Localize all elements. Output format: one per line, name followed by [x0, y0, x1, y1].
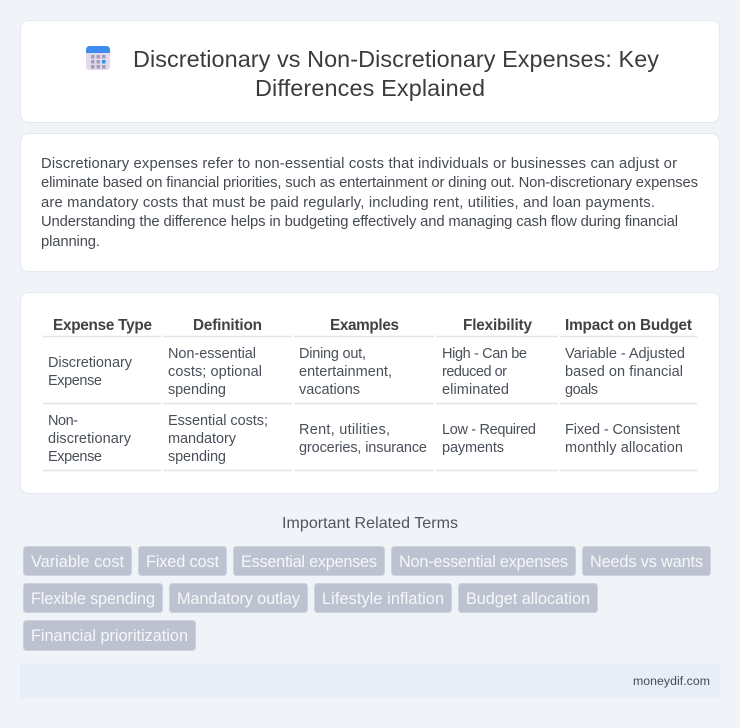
table row: non-discretionary expense: groceries, insurance [299, 440, 427, 456]
tag: financial prioritization: Financial prioritization [31, 627, 188, 645]
table row: discretionary expense: eliminated [442, 382, 509, 398]
table header row: Expense Type [53, 317, 152, 334]
tag: variable cost [24, 546, 132, 576]
panel: header [20, 20, 720, 122]
tag: mandatory outlay: Mandatory outlay [177, 590, 301, 608]
panel: comparison table [20, 292, 720, 494]
table row: discretionary expense: Dining out, [299, 346, 366, 362]
tag: flexible spending: Flexible spending [31, 590, 155, 608]
text block: description: planning. [41, 234, 100, 250]
table row: non-discretionary expense: Low - Required [442, 422, 536, 438]
table header row [53, 317, 692, 334]
tag: variable cost: Variable cost [31, 553, 124, 571]
footer: source: moneydif.com [633, 674, 710, 688]
tag: budget allocation: Budget allocation [466, 590, 590, 608]
title: Differences Explained [255, 75, 485, 101]
table row: discretionary expense: spending [168, 382, 226, 398]
table row: discretionary expense: Non-essential [168, 346, 256, 362]
table row: discretionary expense: costs; optional [168, 364, 262, 380]
tag: budget allocation [458, 584, 598, 612]
table row: discretionary expense [48, 346, 685, 398]
icon: calendar [86, 46, 110, 70]
tag: mandatory outlay [170, 584, 308, 612]
text block: description: Discretionary expenses refer to non-essential costs that individuals or businesses can adjust or [41, 156, 677, 172]
tag: non-essential expenses [392, 546, 576, 576]
panel: intro text [20, 134, 720, 272]
tag: lifestyle inflation: Lifestyle inflation [322, 590, 444, 608]
table row: non-discretionary expense: Fixed - Consistent [565, 422, 680, 438]
tag: flexible spending [24, 584, 162, 612]
table header row: Definition [193, 317, 262, 334]
tag: non-essential expenses: Non-essential expenses [399, 553, 568, 571]
table row: discretionary expense: based on financial [565, 364, 683, 380]
text block: description: eliminate based on financial priorities, such as entertainment or dining out. Non-discretionary expenses [41, 175, 698, 191]
table row: discretionary expense: reduced or [442, 364, 507, 380]
table row: non-discretionary expense: spending [168, 449, 226, 465]
table row: non-discretionary expense: Non- [48, 413, 78, 429]
table row: discretionary expense: Discretionary [48, 355, 133, 371]
table row: discretionary expense: entertainment, [299, 364, 392, 380]
title [133, 46, 659, 101]
tag: needs vs wants [582, 546, 710, 576]
tag: needs vs wants: Needs vs wants [590, 553, 703, 571]
table row: non-discretionary expense: Rent, utilities, [299, 422, 390, 438]
table row: non-discretionary expense: monthly allocation [565, 440, 683, 456]
table row: non-discretionary expense: payments [442, 440, 504, 456]
table row: discretionary expense: goals [565, 382, 598, 398]
table row: non-discretionary expense: Essential costs; [168, 413, 268, 429]
table row: non-discretionary expense: discretionary [48, 431, 132, 447]
text block: description [41, 156, 698, 250]
table row: non-discretionary expense: mandatory [168, 431, 237, 447]
text block: description: Understanding the difference helps in budgeting effectively and managing cash flow during financial [41, 214, 678, 230]
table row: non-discretionary expense: Expense [48, 449, 102, 465]
tag group: related terms [24, 546, 710, 650]
table row: discretionary expense: Expense [48, 373, 102, 389]
table row: discretionary expense: Variable - Adjusted [565, 346, 685, 362]
table row: non-discretionary expense [48, 413, 683, 465]
table row: discretionary expense: vacations [299, 382, 360, 398]
footer bar [20, 664, 720, 698]
tag: essential expenses [234, 546, 384, 576]
heading: important related terms: Important Related Terms [282, 515, 458, 532]
table header row: Impact on Budget [565, 317, 692, 334]
tag: financial prioritization [24, 620, 196, 650]
tag: lifestyle inflation [314, 584, 452, 612]
title: Discretionary vs Non-Discretionary Expenses: Key [133, 46, 659, 72]
tag: fixed cost: Fixed cost [146, 553, 219, 571]
tag: essential expenses: Essential expenses [241, 553, 377, 571]
table header row: Flexibility [463, 317, 532, 334]
tag: fixed cost [138, 546, 226, 576]
text block: description: are mandatory costs that must be paid regularly, including rent, utilities, and loan payments. [41, 195, 655, 211]
table row: discretionary expense: High - Can be [442, 346, 527, 362]
table header row: Examples [330, 317, 399, 334]
